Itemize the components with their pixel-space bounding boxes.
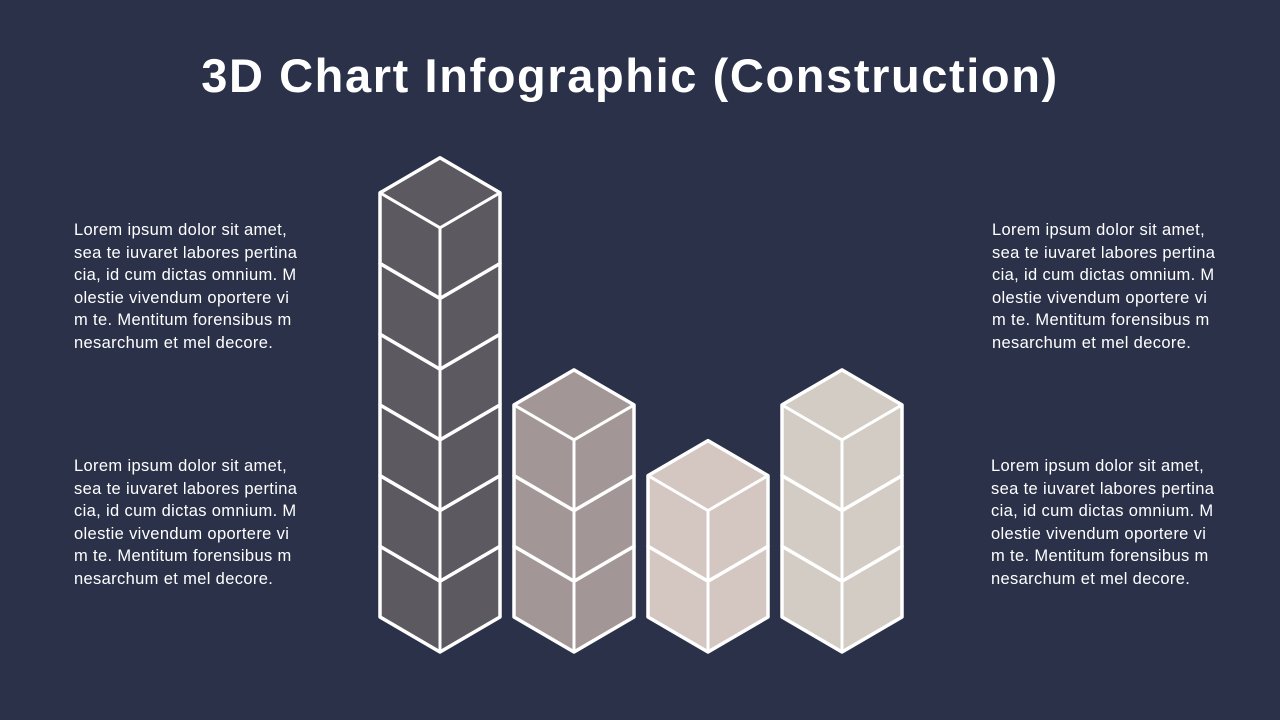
text block: bottom right: Lorem ipsum dolor sit amet, [991, 457, 1204, 475]
text block: top left: Lorem ipsum dolor sit amet, [74, 221, 287, 239]
bar column 3: 2 cubes [648, 441, 768, 652]
text block: top right [992, 221, 1215, 352]
text block: bottom left: sea te iuvaret labores pertina [74, 480, 297, 498]
text block: top right: m te. Mentitum forensibus m [992, 311, 1210, 329]
text block: bottom right: nesarchum et mel decore. [991, 570, 1190, 588]
text block: top left: cia, id cum dictas omnium. M [74, 266, 297, 284]
text block: bottom right: sea te iuvaret labores pertina [991, 480, 1214, 498]
text block: bottom right: m te. Mentitum forensibus m [991, 547, 1209, 565]
text block: top left: olestie vivendum oportere vi [74, 289, 289, 307]
text block: top right: olestie vivendum oportere vi [992, 289, 1207, 307]
bar column 4: 3 cubes [782, 370, 902, 652]
text block: top right: Lorem ipsum dolor sit amet, [992, 221, 1205, 239]
text block: bottom left: m te. Mentitum forensibus m [74, 547, 292, 565]
text block: top right: nesarchum et mel decore. [992, 334, 1191, 352]
text block: top right: sea te iuvaret labores pertina [992, 244, 1215, 262]
text block: bottom right [991, 457, 1214, 588]
text block: top left: m te. Mentitum forensibus m [74, 311, 292, 329]
text block: bottom left [74, 457, 297, 588]
text block: top right: cia, id cum dictas omnium. M [992, 266, 1215, 284]
text block: top left: sea te iuvaret labores pertina [74, 244, 297, 262]
text block: top left [74, 221, 297, 352]
bar column 1: 6 cubes [380, 158, 500, 652]
text block: bottom left: Lorem ipsum dolor sit amet, [74, 457, 287, 475]
text block: top left: nesarchum et mel decore. [74, 334, 273, 352]
text block: bottom right: cia, id cum dictas omnium. M [991, 502, 1214, 520]
text block: bottom left: cia, id cum dictas omnium. M [74, 502, 297, 520]
text block: bottom left: nesarchum et mel decore. [74, 570, 273, 588]
title: 3D Chart Infographic (Construction) [201, 49, 1059, 102]
text block: bottom left: olestie vivendum oportere vi [74, 525, 289, 543]
bar column 2: 3 cubes [514, 370, 634, 652]
text block: bottom right: olestie vivendum oportere vi [991, 525, 1206, 543]
